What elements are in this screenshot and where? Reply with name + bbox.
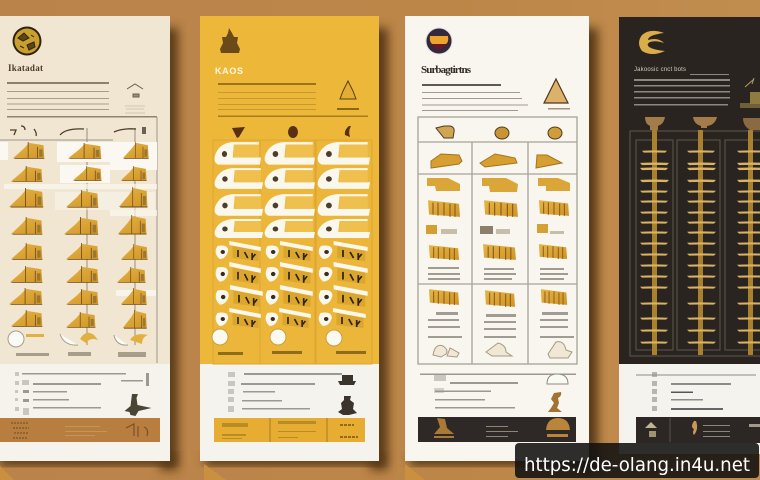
panel: cream poster [0, 16, 170, 461]
legend lines [420, 374, 576, 408]
text block [634, 74, 730, 106]
watermark URL [515, 443, 759, 478]
column frames [213, 140, 372, 364]
gold mountain icons grid [9, 142, 149, 328]
heading: Ikatadat [8, 63, 43, 73]
sketched shells row [433, 342, 572, 358]
text block [422, 84, 528, 111]
column header icons [436, 126, 562, 139]
column header doodles [10, 126, 146, 136]
icon: sunset badge [426, 28, 452, 54]
heading: Jakoosic cnct bots [634, 67, 686, 73]
icon: sketched bowl [547, 374, 568, 384]
column header icons [232, 126, 351, 138]
icon: gold crescent C [639, 31, 665, 54]
heading: KAOS [215, 66, 243, 76]
caption row [16, 352, 146, 357]
icon: dark machines [338, 375, 357, 415]
icon: gold skyline [740, 78, 760, 108]
panel shadows [0, 28, 598, 480]
panel: dark poster [619, 17, 760, 454]
text block [7, 82, 157, 118]
round icons row [212, 329, 342, 346]
panel: white poster [405, 16, 589, 461]
curled icons row [8, 331, 148, 347]
header gold bowls [645, 117, 760, 130]
white row bands [0, 142, 157, 296]
brown footer band [0, 418, 160, 442]
heading: Surbagtirtns [421, 64, 472, 76]
icon: small roof [125, 84, 145, 113]
gold spines [652, 130, 753, 355]
watermark URL: https://de-olang.in4u.net [524, 454, 750, 476]
small text rows [428, 267, 574, 338]
icon: dark figure [124, 394, 152, 416]
icon: small temple [337, 81, 359, 110]
panel: yellow poster [200, 16, 379, 461]
gold blocks grid [426, 154, 570, 307]
table grid [418, 117, 577, 364]
white blob icons grid [214, 142, 370, 328]
icon: gold medallion [12, 26, 42, 56]
table frame [0, 117, 157, 363]
icon: bronze bird [548, 392, 562, 412]
caption row [218, 351, 366, 355]
dark footer band [418, 417, 576, 442]
yellow footer band [214, 418, 365, 442]
legend lines [228, 372, 342, 412]
icon: temple [220, 28, 240, 53]
table frames [630, 131, 760, 356]
gold rib bars [640, 150, 760, 344]
legend lines [15, 372, 149, 415]
legend lines [636, 372, 756, 411]
icon: pyramid shrine [544, 79, 570, 110]
dark footer band [636, 417, 760, 443]
text block [218, 83, 368, 117]
